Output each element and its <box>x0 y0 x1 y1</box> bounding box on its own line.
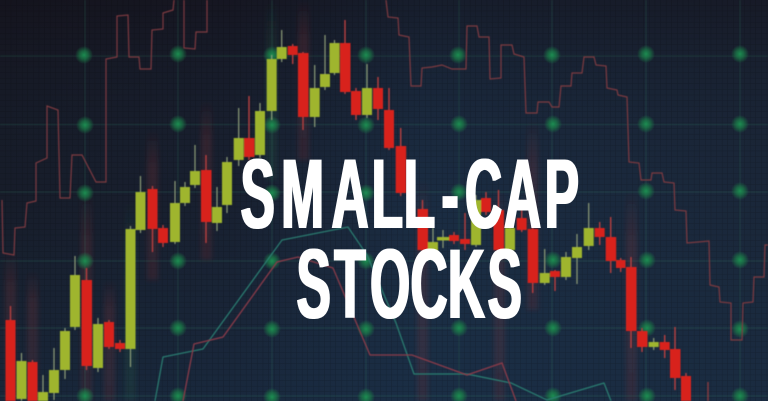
title line: SMALL-CAP: SMALL-CAP <box>240 139 579 249</box>
red indicator line <box>183 257 516 401</box>
red stepped line, upper chart <box>2 0 174 255</box>
title <box>240 139 579 339</box>
teal indicator line <box>155 227 611 401</box>
green grid node dots <box>75 45 749 401</box>
red stepped line, far right section <box>386 0 768 340</box>
red stepped line, right section <box>184 0 207 49</box>
title line: STOCKS: STOCKS <box>297 229 522 339</box>
